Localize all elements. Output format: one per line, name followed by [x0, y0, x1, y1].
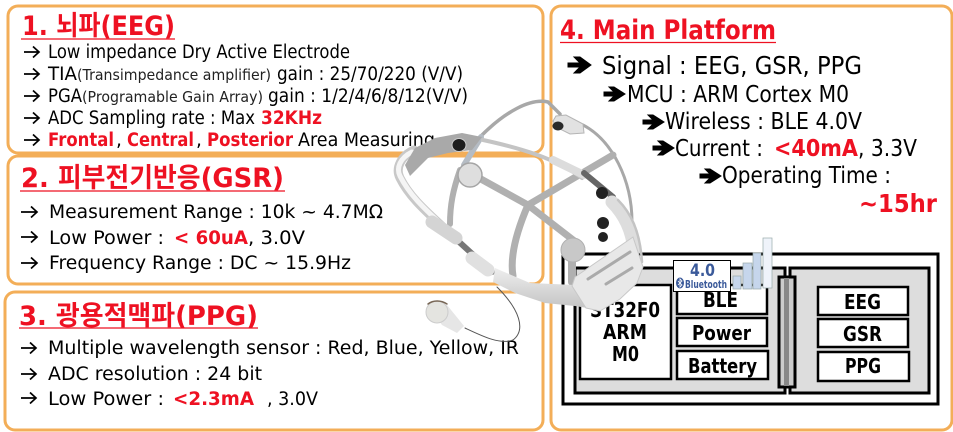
- text: PGA gain: (Programable Gain Array): [82, 88, 263, 106]
- EEG box: EEG: [844, 290, 881, 314]
- text: measuring areas: Central: [127, 130, 194, 151]
- text: current: <40mA: [774, 136, 858, 162]
- text: TIA gain: TIA: [47, 64, 77, 85]
- MCU box: [580, 285, 671, 379]
- main module: [572, 237, 643, 311]
- front band: [405, 133, 482, 176]
- panel: PPG: [5, 292, 543, 430]
- MCU box: M0: [612, 342, 639, 366]
- power box: Power: [692, 321, 752, 345]
- icon: PPG sensor: [426, 301, 464, 333]
- text: current: Current :: [675, 136, 763, 162]
- panel: EEG: [8, 6, 543, 153]
- lower band: [493, 268, 600, 310]
- BLE box: [677, 285, 767, 314]
- GSR box: GSR: [843, 322, 882, 346]
- text: measurement range: Measurement Range : 10k ~ 4.7MΩ: [49, 202, 383, 223]
- text: ADC resolution: ADC resolution : 24 bit: [48, 364, 262, 385]
- text: electrode: Low impedance Dry Active Electrode: [48, 42, 350, 63]
- text: 15hr: ~15hr: [859, 189, 938, 218]
- text: wireless: Wireless : BLE 4.0V: [665, 109, 862, 135]
- text: measuring areas: ,: [196, 130, 202, 151]
- panel: GSR: [8, 156, 543, 284]
- rear rod and electrodes: [584, 173, 613, 197]
- sensor wire: [465, 287, 520, 341]
- power box: [677, 318, 767, 346]
- upper arc: [481, 101, 560, 136]
- top electrode pod: [553, 115, 584, 134]
- text: PGA gain: [24, 86, 468, 107]
- text: low power: , 3.0V: [248, 228, 305, 249]
- text: measuring areas: [24, 130, 435, 151]
- text: low power: , 3.0V: [267, 389, 318, 410]
- text: current: , 3.3V: [858, 136, 917, 162]
- MCU and power block: [575, 268, 785, 393]
- headset illustration: [398, 101, 643, 341]
- text: wavelength sensor: Multiple wavelength sensor : Red, Blue, Yellow, IR: [48, 338, 519, 359]
- text: TIA gain: gain : 25/70/220 (V/V): [277, 64, 463, 85]
- heading: main platform: 4. Main Platform: [560, 15, 776, 46]
- text: measuring areas: Posterior: [207, 130, 294, 151]
- text: low power: <2.3mA: [173, 389, 255, 410]
- text: measuring areas: Area Measuring: [298, 130, 435, 151]
- MCU box: ST32F0: [590, 298, 660, 322]
- icon: Bluetooth 4.0 badge: Bluetooth: [685, 278, 727, 291]
- text: current: [653, 136, 917, 162]
- text: low power: [21, 389, 318, 410]
- battery box: Battery: [688, 354, 757, 378]
- BLE box: BLE: [703, 288, 738, 312]
- icon: signal bars: [733, 238, 772, 289]
- icon: Bluetooth 4.0 badge: [674, 260, 730, 292]
- text: low power: Low Power :: [49, 228, 164, 249]
- panel: main platform: [551, 6, 952, 430]
- heading: PPG: 3. 광용적맥파(PPG): [19, 301, 258, 332]
- block diagram: [563, 254, 938, 404]
- text: PGA gain: PGA: [48, 86, 82, 107]
- PPG box: PPG: [845, 354, 881, 378]
- connector: [779, 277, 795, 387]
- straps: [470, 173, 577, 243]
- text: measuring areas: Frontal: [48, 130, 114, 151]
- heading: EEG: 1. 뇌파(EEG): [22, 11, 175, 42]
- text: low power: [21, 228, 305, 249]
- upper ring: [483, 140, 582, 178]
- text: ADC sampling rate: 32KHz: [261, 108, 322, 129]
- text: PGA gain: gain : 1/2/4/6/8/12(V/V): [268, 86, 468, 107]
- text: TIA gain: (Transimpedance amplifier): [77, 66, 271, 84]
- MCU box: ARM: [603, 320, 647, 344]
- sensor block: [790, 268, 929, 393]
- text: low power: Low Power :: [48, 389, 164, 410]
- text: MCU: MCU : ARM Cortex M0: [627, 82, 849, 108]
- text: low power: < 60uA: [174, 228, 249, 249]
- text: frequency range: Frequency Range : DC ~ 15.9Hz: [49, 253, 351, 274]
- text: ADC sampling rate: ADC Sampling rate : Max: [48, 108, 255, 129]
- text: TIA gain: [24, 64, 463, 85]
- text: operating time: Operating Time :: [722, 163, 891, 189]
- text: measuring areas: ,: [116, 130, 122, 151]
- icon: Bluetooth 4.0 badge: 4.0: [690, 261, 715, 281]
- side band: [398, 150, 445, 229]
- text: signal: Signal : EEG, GSR, PPG: [602, 51, 862, 80]
- heading: GSR: 2. 피부전기반응(GSR): [21, 163, 284, 194]
- knobs: [458, 163, 482, 187]
